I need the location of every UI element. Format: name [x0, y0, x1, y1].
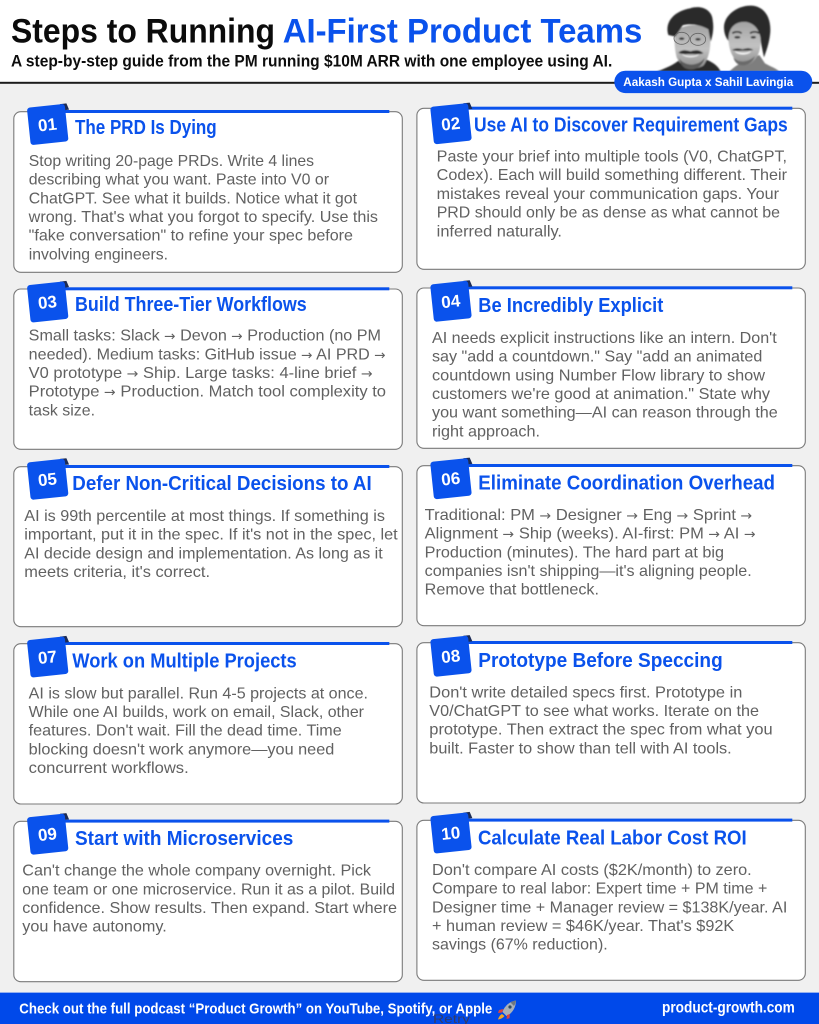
badge: 06: [430, 457, 476, 499]
body: 07: blocking doesn't work anymore—you need: [29, 741, 334, 758]
body: 02: Codex). Each will build something different. Their: [437, 167, 788, 184]
badge: 03: [27, 281, 72, 323]
badge: 04: 04: [440, 291, 462, 312]
badge: 08: [430, 635, 476, 677]
body: 06: Traditional: PM → Designer → Eng → Sprint →: [425, 507, 752, 524]
badge: 01: 01: [37, 115, 58, 135]
body: 08: Don't write detailed specs first. Prototype in: [429, 684, 742, 701]
body: 04: customers we're good at animation." State why: [432, 386, 770, 403]
body: 04: countdown using Number Flow library to show: [432, 367, 766, 384]
heading: 05: Defer Non-Critical Decisions to AI: [72, 473, 372, 495]
panel: step 05: [14, 458, 402, 627]
body: 10: Don't compare AI costs ($2K/month) to zero.: [432, 862, 752, 879]
body: 02: mistakes reveal your communication gaps. Your: [437, 186, 780, 203]
body: 01: "fake conversation" to refine your spec before: [29, 228, 353, 245]
body: 07: [29, 685, 368, 777]
body: 04: [432, 330, 778, 440]
body: 01: describing what you want. Paste into V0 or: [29, 172, 330, 189]
body: 05: important, put it in the spec. If it's not in the spec, let: [24, 527, 398, 544]
panel: step 07: [14, 636, 402, 804]
heading: 08: Prototype Before Speccing: [478, 650, 723, 672]
body: 07: While one AI builds, work on email, Slack, other: [29, 704, 365, 721]
badge: 07: [27, 636, 72, 678]
badge: 02: 02: [440, 114, 461, 135]
body: 02: PRD should only be as dense as what cannot be: [437, 205, 780, 222]
body: 09: one team or one microservice. Run it as a pilot. Build: [22, 881, 395, 898]
badge: 09: [27, 813, 72, 855]
panel: step 03: [14, 281, 402, 449]
body: 04: right approach.: [432, 423, 540, 440]
panel: step 06: [417, 457, 805, 626]
body: 06: companies isn't shipping—it's aligning people.: [425, 563, 752, 580]
body: 10: Compare to real labor: Expert time + PM time +: [432, 881, 767, 898]
body: 01: involving engineers.: [29, 246, 168, 263]
panel: step 02: [417, 102, 805, 269]
body: 01: wrong. That's what you forgot to specify. Use this: [28, 209, 378, 226]
heading: 01: The PRD Is Dying: [75, 117, 217, 139]
footer text: podcast call to action: Check out the full podcast “Product Growth” on YouTube, Spotify, or Apple: [19, 1001, 492, 1017]
badge: 05: [27, 458, 72, 500]
body: 02: [437, 148, 788, 240]
footer bar: [0, 992, 819, 1024]
panel: step 04: [417, 280, 805, 448]
body: 07: features. Don't wait. Fill the dead time. Time: [29, 723, 342, 740]
body: 04: say "add a countdown." Say "add an animated: [432, 349, 762, 366]
body: 08: [429, 684, 773, 757]
title: [11, 13, 642, 51]
heading: 10: Calculate Real Labor Cost ROI: [478, 827, 747, 849]
body: 02: Paste your brief into multiple tools (V0, ChatGPT,: [437, 148, 787, 166]
panel: step 10: [417, 812, 805, 980]
panel: step 09: [14, 813, 402, 982]
body: 04: you want something—AI can reason through the: [432, 405, 778, 422]
body: 07: AI is slow but parallel. Run 4-5 projects at once.: [29, 685, 368, 702]
heading: 06: Eliminate Coordination Overhead: [478, 472, 775, 494]
body: 06: Alignment → Ship (weeks). AI-first: PM → AI →: [425, 526, 756, 543]
body: 06: Remove that bottleneck.: [425, 582, 599, 599]
badge: 06: 06: [440, 469, 461, 490]
heading: 07: Work on Multiple Projects: [72, 650, 297, 672]
body: 08: built. Faster to show than tell with AI tools.: [429, 740, 732, 757]
badge: 03: 03: [37, 292, 58, 313]
body: 06: Production (minutes). The hard part at big: [425, 544, 724, 561]
body: 03: needed). Medium tasks: GitHub issue → AI PRD →: [29, 346, 386, 363]
heading: 09: Start with Microservices: [75, 828, 293, 850]
body: 03: [29, 328, 386, 419]
title: AI-First Product Teams: [283, 13, 642, 51]
body: 01: ChatGPT. See what it builds. Notice what it got: [29, 190, 358, 207]
panel: step 08: [417, 635, 805, 803]
portraits: Aakash Gupta and Sahil Lavingia: [657, 6, 779, 72]
body: 05: AI decide design and implementation. As long as it: [24, 545, 383, 562]
heading: 03: Build Three-Tier Workflows: [75, 294, 307, 316]
panel: step 01: [14, 103, 402, 272]
body: 08: prototype. Then extract the spec from what you: [429, 722, 773, 739]
body: 09: [22, 863, 397, 936]
author name pill: Aakash Gupta x Sahil Lavingia: [623, 75, 793, 89]
badge: 09: 09: [37, 824, 58, 845]
body: 09: you have autonomy.: [22, 919, 167, 936]
body: 10: [432, 862, 787, 954]
body: 10: Designer time + Manager review = $138K/year. AI: [432, 899, 787, 916]
body: 01: Stop writing 20-page PRDs. Write 4 lines: [29, 153, 314, 170]
footer text: website: product-growth.com: [662, 999, 795, 1016]
body: 03: Small tasks: Slack → Devon → Production (no PM: [29, 328, 381, 345]
heading: 04: Be Incredibly Explicit: [478, 295, 664, 317]
badge: 08: 08: [440, 646, 461, 667]
body: 10: savings (67% reduction).: [432, 937, 608, 954]
badge: 02: [430, 102, 476, 144]
body: 08: V0/ChatGPT to see what works. Iterate on the: [429, 703, 759, 720]
body: 05: meets criteria, it's correct.: [24, 564, 210, 581]
body: 09: confidence. Show results. Then expand. Start where: [22, 900, 397, 917]
badge: 10: [430, 812, 476, 854]
body: 01: [28, 153, 378, 263]
author name pill: [614, 71, 812, 93]
body: 09: Can't change the whole company overnight. Pick: [22, 863, 371, 880]
icon: rocket: [498, 1000, 516, 1020]
body: 03: Prototype → Production. Match tool complexity to: [29, 384, 386, 401]
body: 10: + human review = $46K/year. That's $92K: [432, 918, 735, 935]
badge: 10: 10: [440, 823, 461, 844]
badge: 07: 07: [37, 647, 58, 668]
badge: 05: 05: [37, 469, 58, 490]
body: 02: inferred naturally.: [437, 223, 562, 240]
body: 03: task size.: [29, 402, 95, 419]
body: 07: concurrent workflows.: [29, 760, 189, 777]
badge: 01: [27, 103, 72, 145]
body: 05: AI is 99th percentile at most things. If something is: [24, 508, 385, 525]
body: 03: V0 prototype → Ship. Large tasks: 4-line brief →: [29, 365, 373, 382]
body: 04: AI needs explicit instructions like an intern. Don't: [432, 330, 777, 347]
subtitle: A step-by-step guide from the PM running $10M ARR with one employee using AI.: [11, 52, 612, 71]
badge: 04: [430, 280, 476, 322]
body: 06: [425, 507, 756, 599]
title: Steps to Running: [11, 13, 275, 51]
body: 05: [24, 508, 398, 581]
